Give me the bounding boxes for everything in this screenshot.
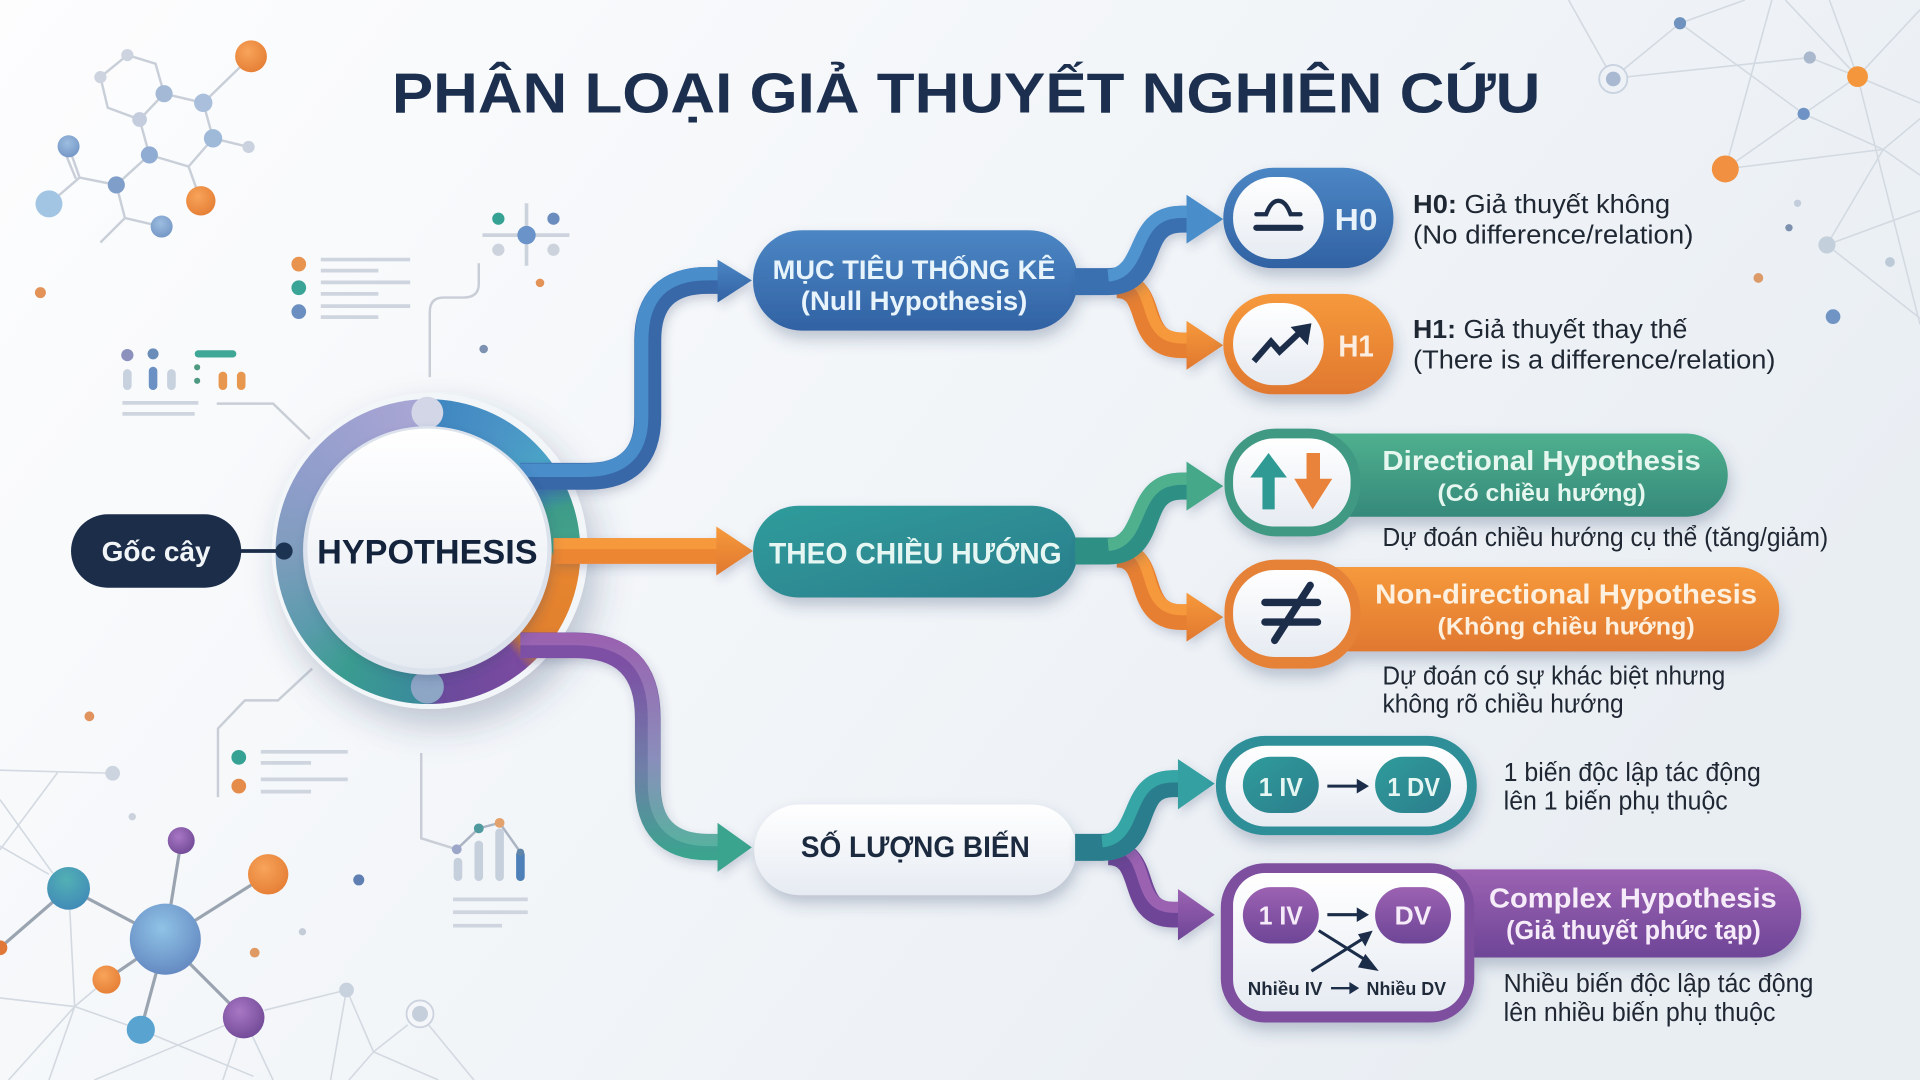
chip: 1 IV purple xyxy=(1243,887,1319,943)
decoration: network bottom left xyxy=(0,770,474,1080)
central hub: HYPOTHESIS ring xyxy=(272,393,588,709)
node: Mục tiêu thống kê: (Null Hypothesis) xyxy=(801,286,1027,316)
text: H1 description: (There is a difference/relation) xyxy=(1413,345,1776,375)
panel: H1: H1 xyxy=(1338,329,1374,363)
text: complex description xyxy=(1504,968,1813,1027)
text: 1 IV 1 DV description: lên 1 biến phụ thuộc xyxy=(1504,785,1728,815)
arrow: IV to DV purple xyxy=(1327,907,1369,922)
decoration: crosshair icon xyxy=(479,203,569,353)
hub centre disc: HYPOTHESIS xyxy=(317,533,538,571)
text: H1 description: H1: Giả thuyết thay thế xyxy=(1413,314,1688,344)
text: 1 IV 1 DV description xyxy=(1504,757,1761,815)
node: Mục tiêu thống kê xyxy=(753,230,1078,331)
text: non-directional description: Dự đoán có sự khác biệt nhưng xyxy=(1382,660,1725,690)
arrow: to H1 xyxy=(1117,279,1223,370)
chip: DV: DV xyxy=(1395,902,1431,930)
label: Nhiều IV to Nhiều DV xyxy=(1248,978,1447,999)
chip: 1 IV: 1 IV xyxy=(1259,774,1303,802)
ring node top xyxy=(411,397,443,429)
ring node bottom xyxy=(411,670,444,703)
text: non-directional description: không rõ chiều hướng xyxy=(1382,689,1624,719)
chip: 1 IV purple: 1 IV xyxy=(1259,902,1303,930)
arrow: IV to DV xyxy=(1327,779,1369,793)
node: Mục tiêu thống kê: MỤC TIÊU THỐNG KÊ xyxy=(773,253,1056,285)
decoration: molecule bottom left xyxy=(0,711,433,1044)
text: non-directional description xyxy=(1382,660,1725,719)
arrow: to Directional xyxy=(1075,462,1223,551)
arrow: hub to Theo chiều hướng xyxy=(553,527,753,576)
panel: H0 xyxy=(1223,168,1393,268)
arrow: to Non-directional xyxy=(1117,549,1223,642)
arrows: crossing xyxy=(1311,931,1379,971)
arrow: hub to Mục tiêu thống kê xyxy=(520,260,752,476)
label: Nhiều IV to Nhiều DV: Nhiều DV xyxy=(1367,978,1447,999)
text: complex description: lên nhiều biến phụ thuộc xyxy=(1504,997,1776,1027)
arrow: to H0 xyxy=(1075,195,1223,282)
text: complex description: Nhiều biến độc lập tác động xyxy=(1504,968,1813,998)
text: H0 description: H0: Giả thuyết không xyxy=(1413,189,1670,219)
panel: Directional Hypothesis xyxy=(1224,429,1728,536)
node: Số lượng biến: SỐ LƯỢNG BIẾN xyxy=(801,830,1030,864)
chip: 1 IV xyxy=(1243,757,1319,813)
arrow: hub to Số lượng biến xyxy=(520,639,752,872)
root pill: Gốc cây xyxy=(71,514,293,588)
chip: DV xyxy=(1375,887,1451,943)
panel: Non-directional Hypothesis: Non-directional Hypothesis xyxy=(1375,579,1757,610)
hub centre disc xyxy=(303,426,552,675)
panel: Complex Hypothesis: (Giả thuyết phức tạp) xyxy=(1506,917,1761,945)
icon: trending arrow xyxy=(1254,323,1311,361)
decoration: connector top xyxy=(430,263,479,377)
node: Số lượng biến xyxy=(754,804,1076,895)
decoration: molecule top left xyxy=(35,40,267,298)
text: directional description: Dự đoán chiều hướng cụ thể (tăng/giảm) xyxy=(1382,522,1828,552)
title: PHÂN LOẠI GIẢ THUYẾT NGHIÊN CỨU xyxy=(392,62,1540,125)
icon: up and down arrows xyxy=(1250,453,1332,509)
decoration: network top right xyxy=(1569,0,1920,324)
decoration: connector and list bottom xyxy=(218,669,348,797)
root pill: Gốc cây: Gốc cây xyxy=(102,536,211,567)
arrow: to 1 IV 1 DV xyxy=(1075,759,1215,847)
panel: Non-directional Hypothesis: (Không chiều hướng) xyxy=(1438,613,1695,640)
chip: 1 DV: 1 DV xyxy=(1387,774,1440,802)
panel: Directional Hypothesis: Directional Hypothesis xyxy=(1382,445,1701,476)
panel: Non-directional Hypothesis xyxy=(1224,560,1779,669)
decoration: small chart left xyxy=(121,348,310,439)
decoration: small bar chart bottom xyxy=(421,753,528,926)
icon: not equal xyxy=(1265,585,1318,640)
node: Theo chiều hướng xyxy=(753,506,1078,598)
node: Theo chiều hướng: THEO CHIỀU HƯỚNG xyxy=(769,536,1062,570)
panel: Complex Hypothesis: Complex Hypothesis xyxy=(1489,882,1777,913)
panel: Complex Hypothesis xyxy=(1221,863,1801,1022)
panel: H1 xyxy=(1223,294,1393,394)
panel: Directional Hypothesis: (Có chiều hướng) xyxy=(1438,480,1646,507)
icon: equal-hump xyxy=(1256,201,1300,228)
text: H0 description xyxy=(1413,189,1693,250)
label: Nhiều IV to Nhiều DV: Nhiều IV xyxy=(1248,978,1323,999)
panel: 1 IV to 1 DV xyxy=(1216,736,1477,835)
chip: 1 DV xyxy=(1375,757,1451,813)
text: H1 description xyxy=(1413,314,1776,375)
text: 1 IV 1 DV description: 1 biến độc lập tác động xyxy=(1504,757,1761,787)
arrow: to Complex xyxy=(1108,846,1215,940)
text: H0 description: (No difference/relation) xyxy=(1413,220,1693,250)
panel: H0: H0 xyxy=(1335,203,1378,237)
decoration: list icon xyxy=(291,257,410,319)
